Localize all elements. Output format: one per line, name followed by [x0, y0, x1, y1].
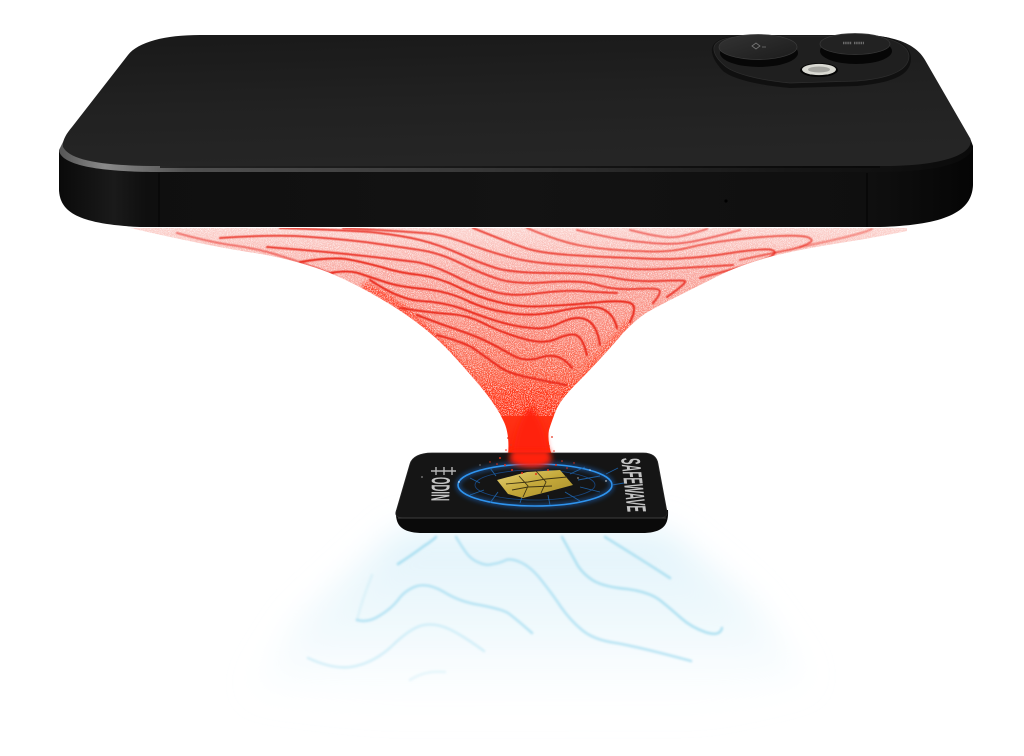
- card: SAFEWAVE: [615, 458, 652, 512]
- phone side seams: [159, 167, 880, 227]
- card: ODIN: [425, 477, 456, 501]
- red signal funnel: [120, 226, 920, 461]
- red contour lines: [177, 228, 872, 385]
- flash: [800, 63, 838, 77]
- card edge highlight: [398, 517, 666, 519]
- speckle grain: [120, 226, 920, 416]
- red funnel neck: [513, 405, 548, 458]
- phone: [59, 34, 973, 227]
- antenna ring: [458, 464, 624, 506]
- lens right: [820, 34, 892, 64]
- camera plateau: [712, 34, 911, 88]
- card: [396, 453, 668, 533]
- blue signal waves below card: [250, 530, 810, 715]
- phone metal rim: [59, 138, 973, 172]
- gold contact chip: [497, 470, 573, 498]
- card side: [396, 510, 668, 533]
- lens left: [719, 34, 798, 67]
- crown mark: [431, 467, 456, 475]
- card top face: [396, 453, 667, 518]
- red edge bands: [363, 285, 630, 425]
- side button hint: [724, 199, 728, 203]
- phone body side: [59, 146, 973, 227]
- red particles on card: [421, 436, 607, 483]
- phone back face: [63, 35, 971, 166]
